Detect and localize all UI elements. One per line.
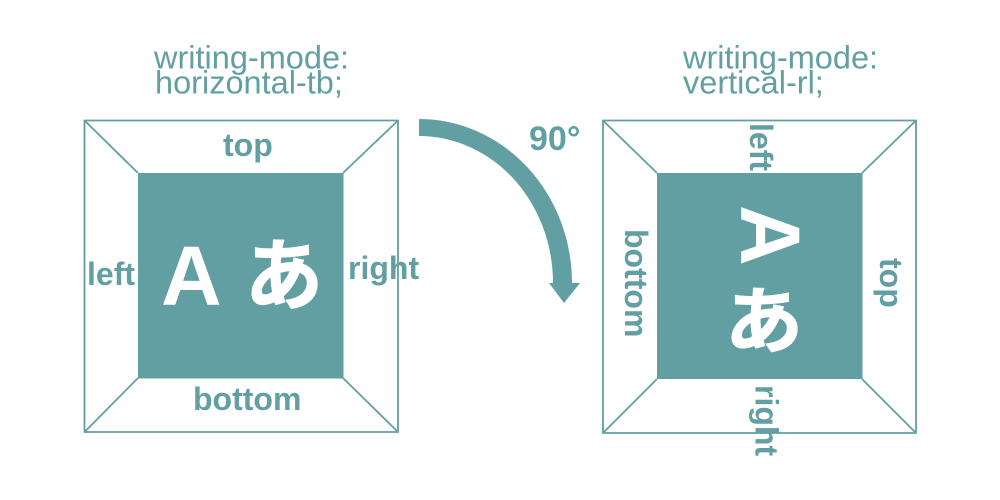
label: left, rotated: left (743, 123, 779, 171)
label: right, rotated: right (748, 385, 784, 456)
label: right: right (348, 250, 419, 286)
label: bottom, rotated: bottom (618, 229, 654, 337)
panel: vertical writing mode box (603, 120, 916, 456)
arrow: 90 degree clockwise rotation (419, 119, 580, 303)
label: top: top (223, 127, 273, 163)
inner square (138, 173, 344, 378)
glyph: hiragana a: あ (245, 232, 323, 320)
label: bottom: bottom (193, 381, 301, 417)
panel: horizontal writing mode box (84, 120, 419, 432)
outer frame with corner lines (84, 120, 398, 432)
label: top, rotated: top (873, 258, 909, 308)
heading: vertical-rl: writing-mode: (682, 40, 878, 76)
glyph: A, rotated: A (723, 205, 817, 266)
inner square (657, 173, 862, 379)
label: left: left (87, 256, 135, 292)
heading: horizontal-tb: horizontal-tb; (155, 64, 343, 100)
heading: horizontal-tb (153, 40, 349, 100)
heading: vertical-rl: vertical-rl; (683, 64, 824, 100)
outer frame with corner lines (603, 120, 916, 433)
glyph: hiragana a, upright: あ (725, 282, 803, 362)
label: 90 degrees: 90° (529, 120, 580, 158)
heading: horizontal-tb: writing-mode: (153, 40, 349, 76)
heading: vertical-rl (682, 40, 878, 100)
glyph: A: A (161, 229, 222, 323)
